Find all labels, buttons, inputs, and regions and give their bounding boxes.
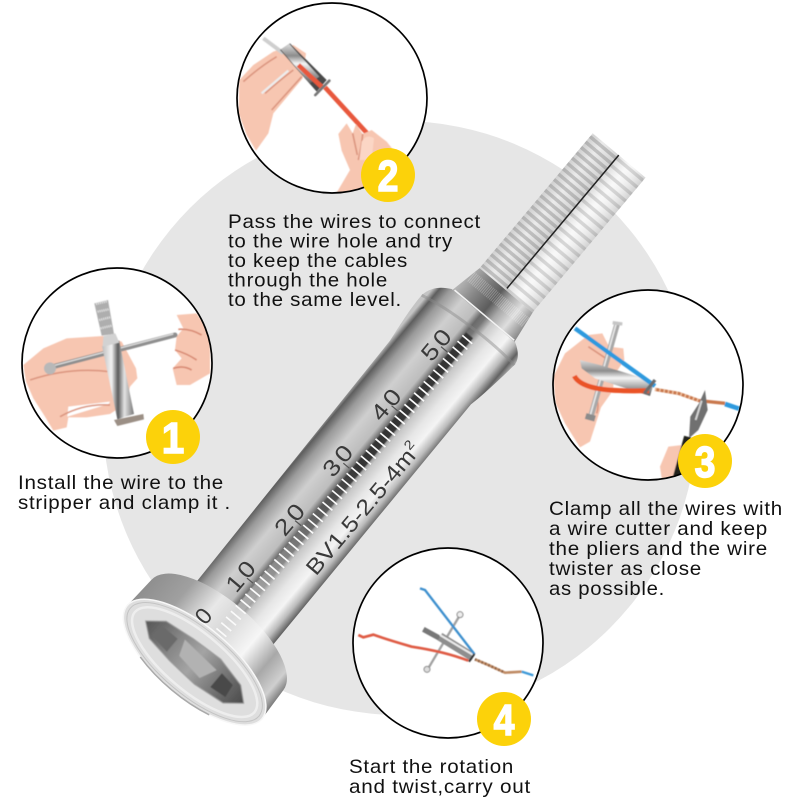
panel: step 2 photo: [238, 36, 423, 192]
text: step 4 caption: and twist,carry out: [349, 776, 531, 798]
step 4 twisted wires and stripper: [358, 588, 533, 675]
threaded rod: [480, 133, 646, 312]
text: step 1 caption: stripper and clamp it .: [18, 492, 231, 514]
text: step 4 caption: Start the rotation: [349, 756, 514, 778]
badge 4: [477, 692, 531, 746]
background: large grey circle: [103, 121, 697, 715]
step 1 ring: [22, 268, 212, 458]
step 4 ring: [353, 548, 543, 738]
hexagonal socket opening: [135, 606, 256, 716]
threaded collar: [448, 261, 538, 347]
text: step 2 caption: Pass the wires to connect: [228, 211, 481, 233]
badge 2: 2: [378, 151, 398, 201]
grip body: [179, 277, 526, 659]
text: step 1 caption: Install the wire to the: [18, 472, 224, 494]
panel: step 3 photo: [553, 290, 743, 480]
text: step 2 caption: to the wire hole and try: [228, 230, 453, 252]
grip shoulder highlight: [422, 289, 516, 370]
text: step 3 caption: Clamp all the wires with: [549, 498, 783, 520]
wire twister tool: [104, 99, 687, 746]
text: step 4 caption: [349, 756, 531, 798]
scale ticks: [209, 326, 473, 635]
size marking: 2: [401, 437, 417, 453]
badge 1: 1: [162, 413, 184, 462]
step 1 hands and stripper: [23, 300, 210, 431]
badge 2: [361, 148, 415, 202]
flange face: [104, 578, 285, 746]
badge 1: [146, 410, 200, 464]
scale numbers: 50: [415, 321, 459, 366]
text: step 2 caption: to the same level.: [228, 289, 402, 311]
step 3 hands, wires and pliers: [553, 323, 739, 478]
badge 3: [678, 434, 732, 488]
scale numbers: 40: [365, 381, 409, 426]
badge 3: 3: [695, 437, 715, 487]
size marking: BV1.5-2.5-4m: [301, 460, 407, 580]
text: step 3 caption: a wire cutter and keep: [549, 518, 768, 540]
text: step 2 caption: to keep the cables: [228, 250, 408, 272]
step 2 ring: [237, 3, 427, 193]
text: step 2 caption: [228, 211, 481, 311]
text: step 2 caption: through the hole: [228, 270, 388, 292]
badge 4: 4: [494, 695, 515, 745]
text: step 3 caption: [549, 498, 783, 600]
scale numbers: 10: [220, 553, 263, 597]
panel: step 1 photo: [22, 268, 212, 458]
panel: step 4 photo: [354, 549, 542, 715]
scale numbers: [189, 318, 459, 632]
flange rim: [104, 551, 308, 746]
scale numbers: 30: [317, 437, 361, 482]
text: step 1 caption: [18, 472, 231, 514]
step 3 ring: [553, 290, 743, 480]
text: step 3 caption: as possible.: [549, 578, 665, 600]
step 2 hands and wire: [239, 38, 393, 193]
scale numbers: 0: [189, 603, 217, 629]
scale numbers: 20: [269, 496, 313, 541]
text: step 3 caption: the pliers and the wire: [549, 538, 768, 560]
text: step 3 caption: twister as close: [549, 558, 702, 580]
